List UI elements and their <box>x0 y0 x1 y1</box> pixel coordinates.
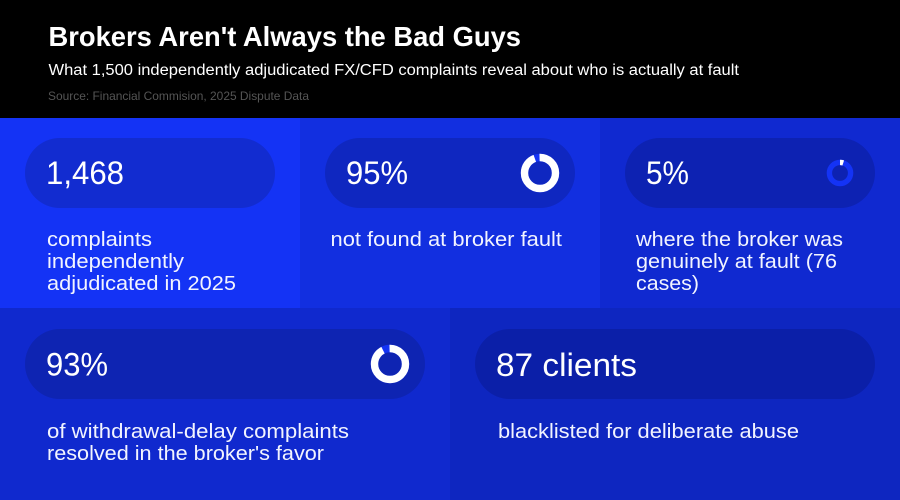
stat pill: 93%: 93% <box>46 346 108 382</box>
panel: 87 clients <box>450 308 900 500</box>
label: where the broker was at fault <box>635 229 843 295</box>
label: not found at broker fault: not found at broker fault <box>330 229 562 251</box>
stat pill: 93% <box>25 329 425 399</box>
stat pill: 87 clients: 87 clients <box>496 347 637 383</box>
panel: 95% not at fault <box>300 118 600 308</box>
stat pill: 1,468: 1,468 <box>46 155 124 191</box>
panel: 5% at fault <box>600 118 900 308</box>
label: complaints: complaints <box>47 229 152 251</box>
label: withdrawal-delay complaints: resolved in the broker's favor <box>47 443 324 465</box>
stat pill: 95% <box>325 138 575 208</box>
label: blacklisted: blacklisted for deliberate abuse <box>498 421 799 443</box>
donut: 95 percent <box>524 158 556 188</box>
title: Brokers Aren't Always the Bad Guys <box>48 21 521 52</box>
subtitle: What 1,500 independently adjudicated FX/CFD complaints reveal about who is actually at fault <box>48 62 740 79</box>
label: complaints: adjudicated in 2025 <box>47 273 236 295</box>
label: withdrawal-delay complaints <box>47 421 349 465</box>
label: complaints <box>47 229 236 295</box>
label: complaints: independently <box>47 251 184 273</box>
donut: 93 percent <box>374 348 406 380</box>
label: where the broker was at fault: where the broker was <box>635 229 843 251</box>
stat pill: 5% <box>625 138 875 208</box>
label: where the broker was at fault: cases) <box>636 273 699 295</box>
stat pill: 1,468 <box>25 138 275 208</box>
panel: 1,468 complaints <box>0 118 300 308</box>
source note: Source: Financial Commision, 2025 Dispute Data <box>48 89 309 103</box>
label: withdrawal-delay complaints: of withdrawal-delay complaints <box>47 421 349 443</box>
stat pill: 5%: 5% <box>646 155 689 191</box>
donut: 5 percent <box>829 162 851 184</box>
stat pill: 95%: 95% <box>346 155 408 191</box>
stat pill: 87 clients <box>475 329 875 399</box>
label: where the broker was at fault: genuinely at fault (76 <box>636 251 837 273</box>
panel: 93% withdrawal-delay <box>0 308 450 500</box>
